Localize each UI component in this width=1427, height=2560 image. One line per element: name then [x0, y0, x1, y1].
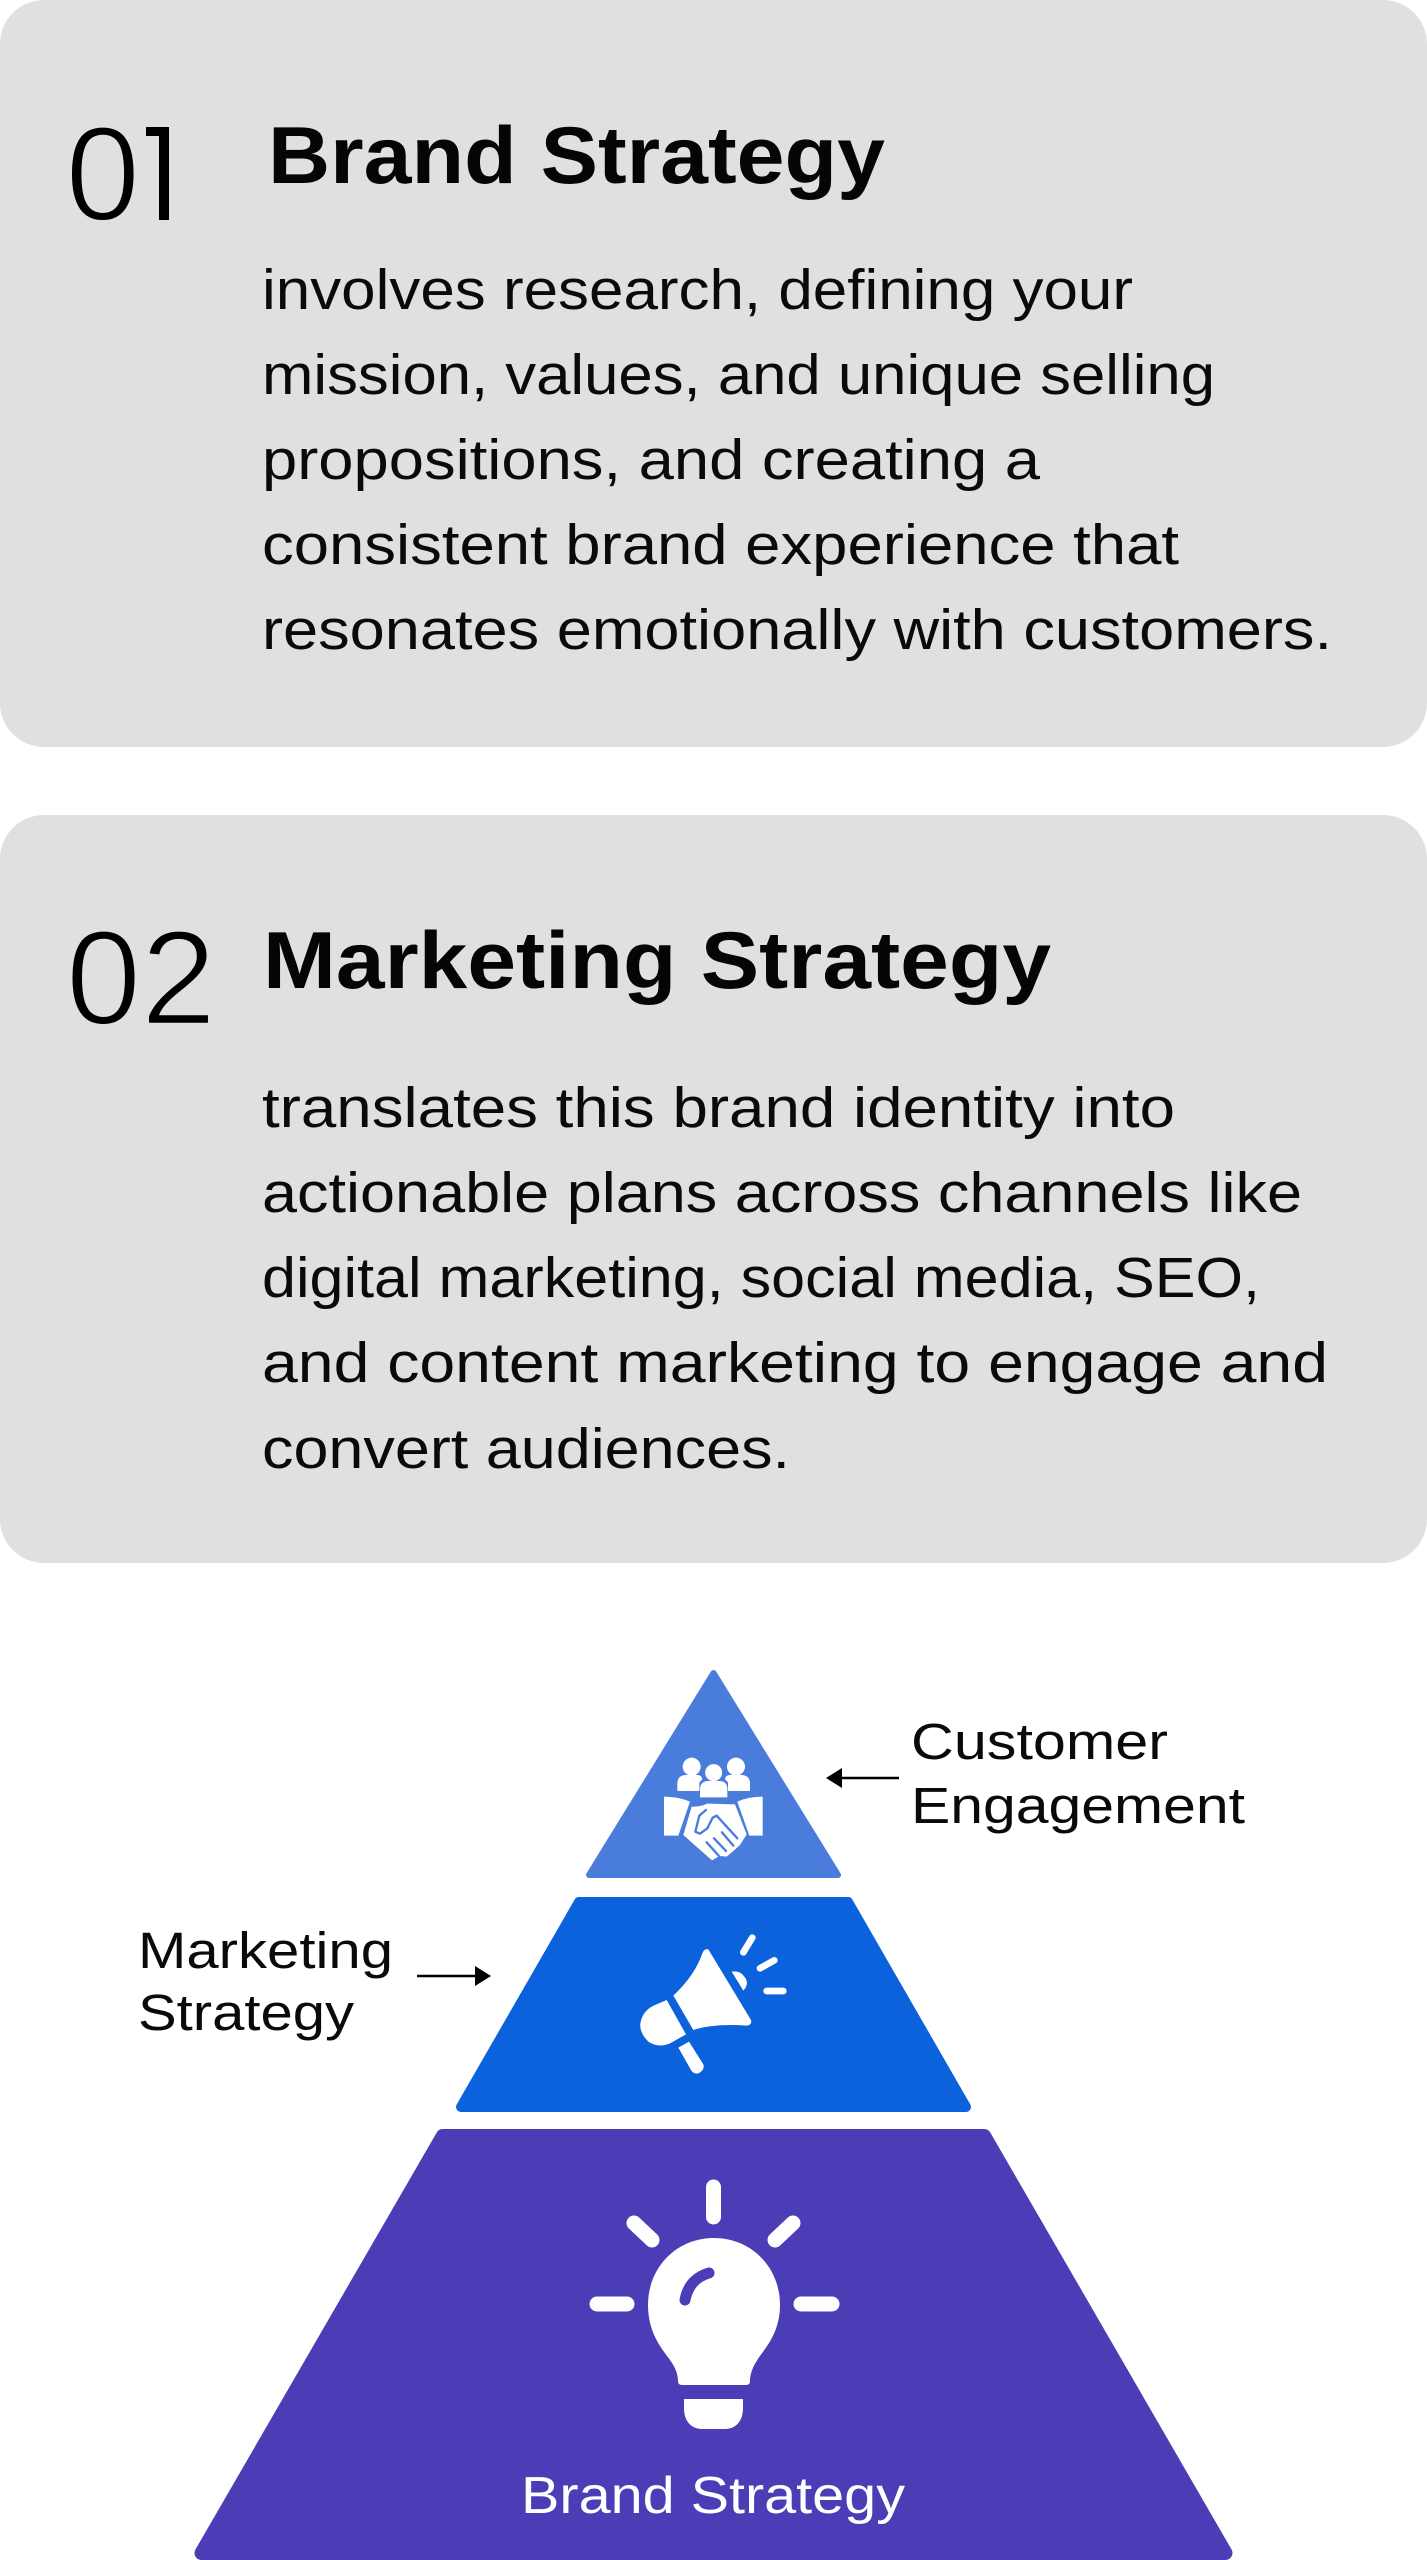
- number 02: 02: [66, 904, 216, 1053]
- label: brand strategy: Brand Strategy: [521, 2467, 905, 2525]
- heading: brand strategy: Brand Strategy: [268, 111, 885, 201]
- pyramid tier: customer engagement: [589, 1673, 838, 1875]
- body text: brand strategy: resonates emotionally with customers.: [262, 598, 1332, 662]
- number 01: 1: [135, 100, 191, 249]
- label: customer engagement: Customer: [911, 1713, 1168, 1770]
- body text: brand strategy: [262, 258, 1332, 662]
- label: marketing strategy: Strategy: [138, 1984, 355, 2041]
- icon: people and handshake: [664, 1758, 763, 1860]
- panel: brand strategy: [0, 0, 1427, 747]
- arrow: to customer engagement: [826, 1768, 899, 1788]
- icon: megaphone: [640, 1938, 783, 2074]
- pyramid tier: brand strategy: [202, 2136, 1226, 2553]
- body text: marketing strategy: and content marketing to engage and: [262, 1331, 1328, 1395]
- label: customer engagement: Engagement: [911, 1777, 1245, 1834]
- pyramid tier: marketing strategy: [461, 1902, 966, 2107]
- body text: marketing strategy: [262, 1076, 1328, 1481]
- icon: light bulb: [597, 2187, 832, 2429]
- number 01: [66, 100, 193, 249]
- label: customer engagement: [911, 1713, 1245, 1834]
- body text: marketing strategy: digital marketing, social media, SEO,: [262, 1246, 1260, 1310]
- body text: brand strategy: mission, values, and unique selling: [262, 343, 1215, 407]
- number 01: 0: [66, 100, 140, 249]
- body text: marketing strategy: convert audiences.: [262, 1417, 790, 1481]
- body text: brand strategy: involves research, defining your: [262, 258, 1133, 322]
- arrow: to marketing strategy: [417, 1966, 491, 1986]
- body text: marketing strategy: translates this brand identity into: [262, 1076, 1175, 1140]
- body text: brand strategy: propositions, and creating a: [262, 428, 1040, 492]
- label: marketing strategy: [138, 1922, 393, 2041]
- body text: marketing strategy: actionable plans across channels like: [262, 1161, 1302, 1225]
- label: marketing strategy: Marketing: [138, 1922, 393, 1979]
- body text: brand strategy: consistent brand experience that: [262, 513, 1179, 577]
- heading: marketing strategy: Marketing Strategy: [263, 916, 1051, 1006]
- pyramid chart: [202, 1673, 1226, 2553]
- panel: marketing strategy: [0, 815, 1427, 1563]
